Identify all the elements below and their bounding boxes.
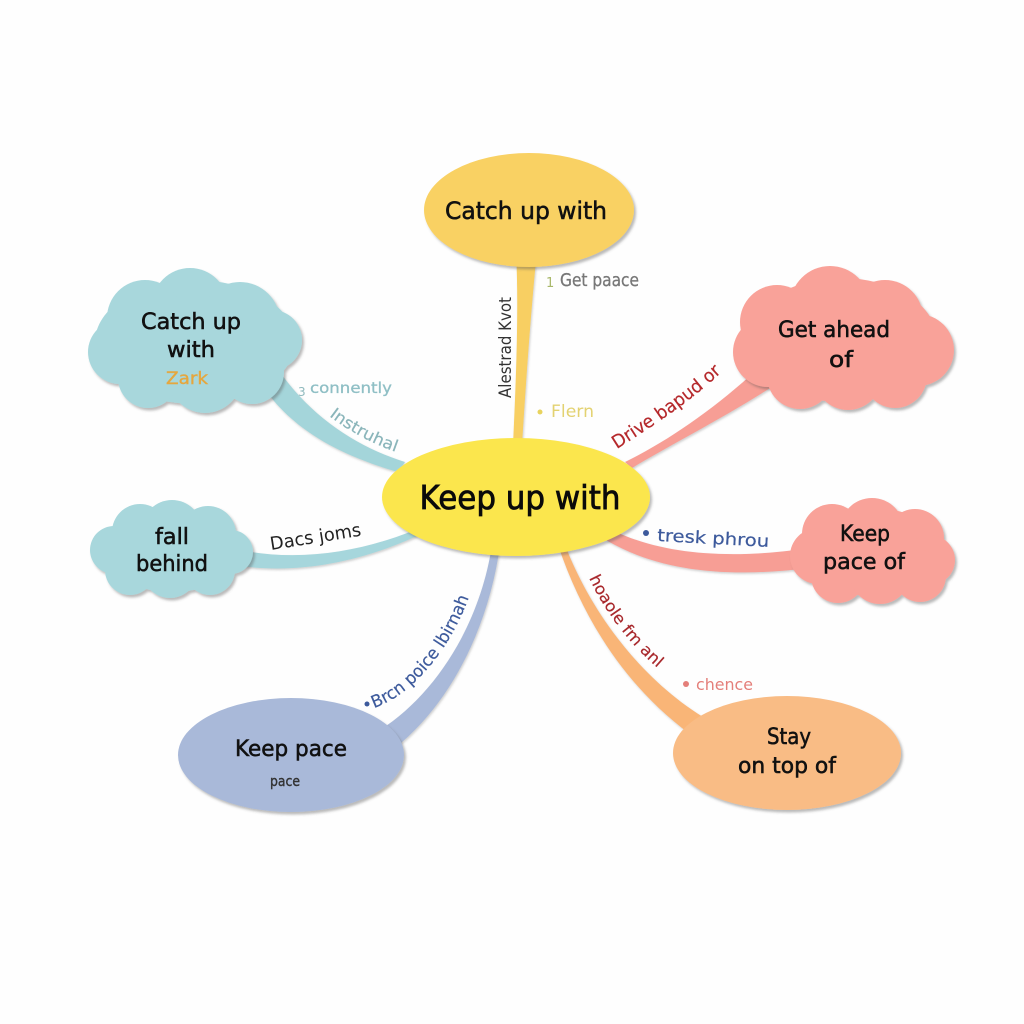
node: keep pace of xyxy=(790,498,955,604)
label: dacs joms: Dacs joms xyxy=(268,520,363,555)
central node: keep up with: Keep up with xyxy=(420,478,620,517)
label: flern: Flern xyxy=(551,402,594,422)
node: teal cloud: with xyxy=(167,338,215,363)
node: fall behind xyxy=(90,500,253,598)
label: connently: 3 xyxy=(298,385,306,399)
label: drive bapud or: Drive bapud or xyxy=(611,364,719,448)
node: stay on top of: on top of xyxy=(738,754,837,779)
node: teal cloud xyxy=(88,268,302,413)
label: instruhal: Instruhal xyxy=(330,408,398,452)
node: catch up with: Catch up with xyxy=(445,197,607,225)
connector: get ahead xyxy=(625,362,775,468)
central node: keep up with xyxy=(382,438,650,556)
node: keep pace xyxy=(178,698,404,812)
label: hoaole fm anl: hoaole fm anl xyxy=(590,574,664,668)
label: tresk phrou: tresk phrou xyxy=(657,526,770,552)
connector: teal cloud xyxy=(262,375,405,472)
node: keep pace of: Keep xyxy=(840,522,890,547)
connector: fall behind xyxy=(240,530,417,568)
connector: stay on top of xyxy=(558,545,708,734)
node: fall behind: fall xyxy=(155,525,189,550)
node: catch up with xyxy=(424,153,634,267)
node: keep pace: pace xyxy=(270,774,300,790)
connector: keep pace xyxy=(380,545,500,748)
connector: keep pace of xyxy=(606,528,810,572)
node: keep pace: Keep pace xyxy=(235,737,347,762)
connector: catch up with xyxy=(513,250,537,445)
node: stay on top of: Stay xyxy=(767,725,811,750)
label: brcn poice lbirnah: Brcn poice lbirnah xyxy=(370,596,468,708)
label: vertical text on yellow connector: Alestrad Kvot xyxy=(496,297,516,398)
label: get pace: 1 xyxy=(546,276,554,291)
node: teal cloud: Catch up xyxy=(141,310,241,335)
label: connently: connently xyxy=(310,379,392,397)
node: stay on top of xyxy=(673,696,901,810)
label: chence: chence xyxy=(696,675,753,694)
label: get pace: Get paace xyxy=(560,270,639,291)
node: get ahead of: of xyxy=(829,348,854,373)
node: teal cloud: Zark xyxy=(166,369,208,389)
node: keep pace of: pace of xyxy=(823,550,906,575)
node: get ahead of xyxy=(733,266,954,410)
node: get ahead of: Get ahead xyxy=(778,318,890,343)
node: fall behind: behind xyxy=(136,552,208,577)
